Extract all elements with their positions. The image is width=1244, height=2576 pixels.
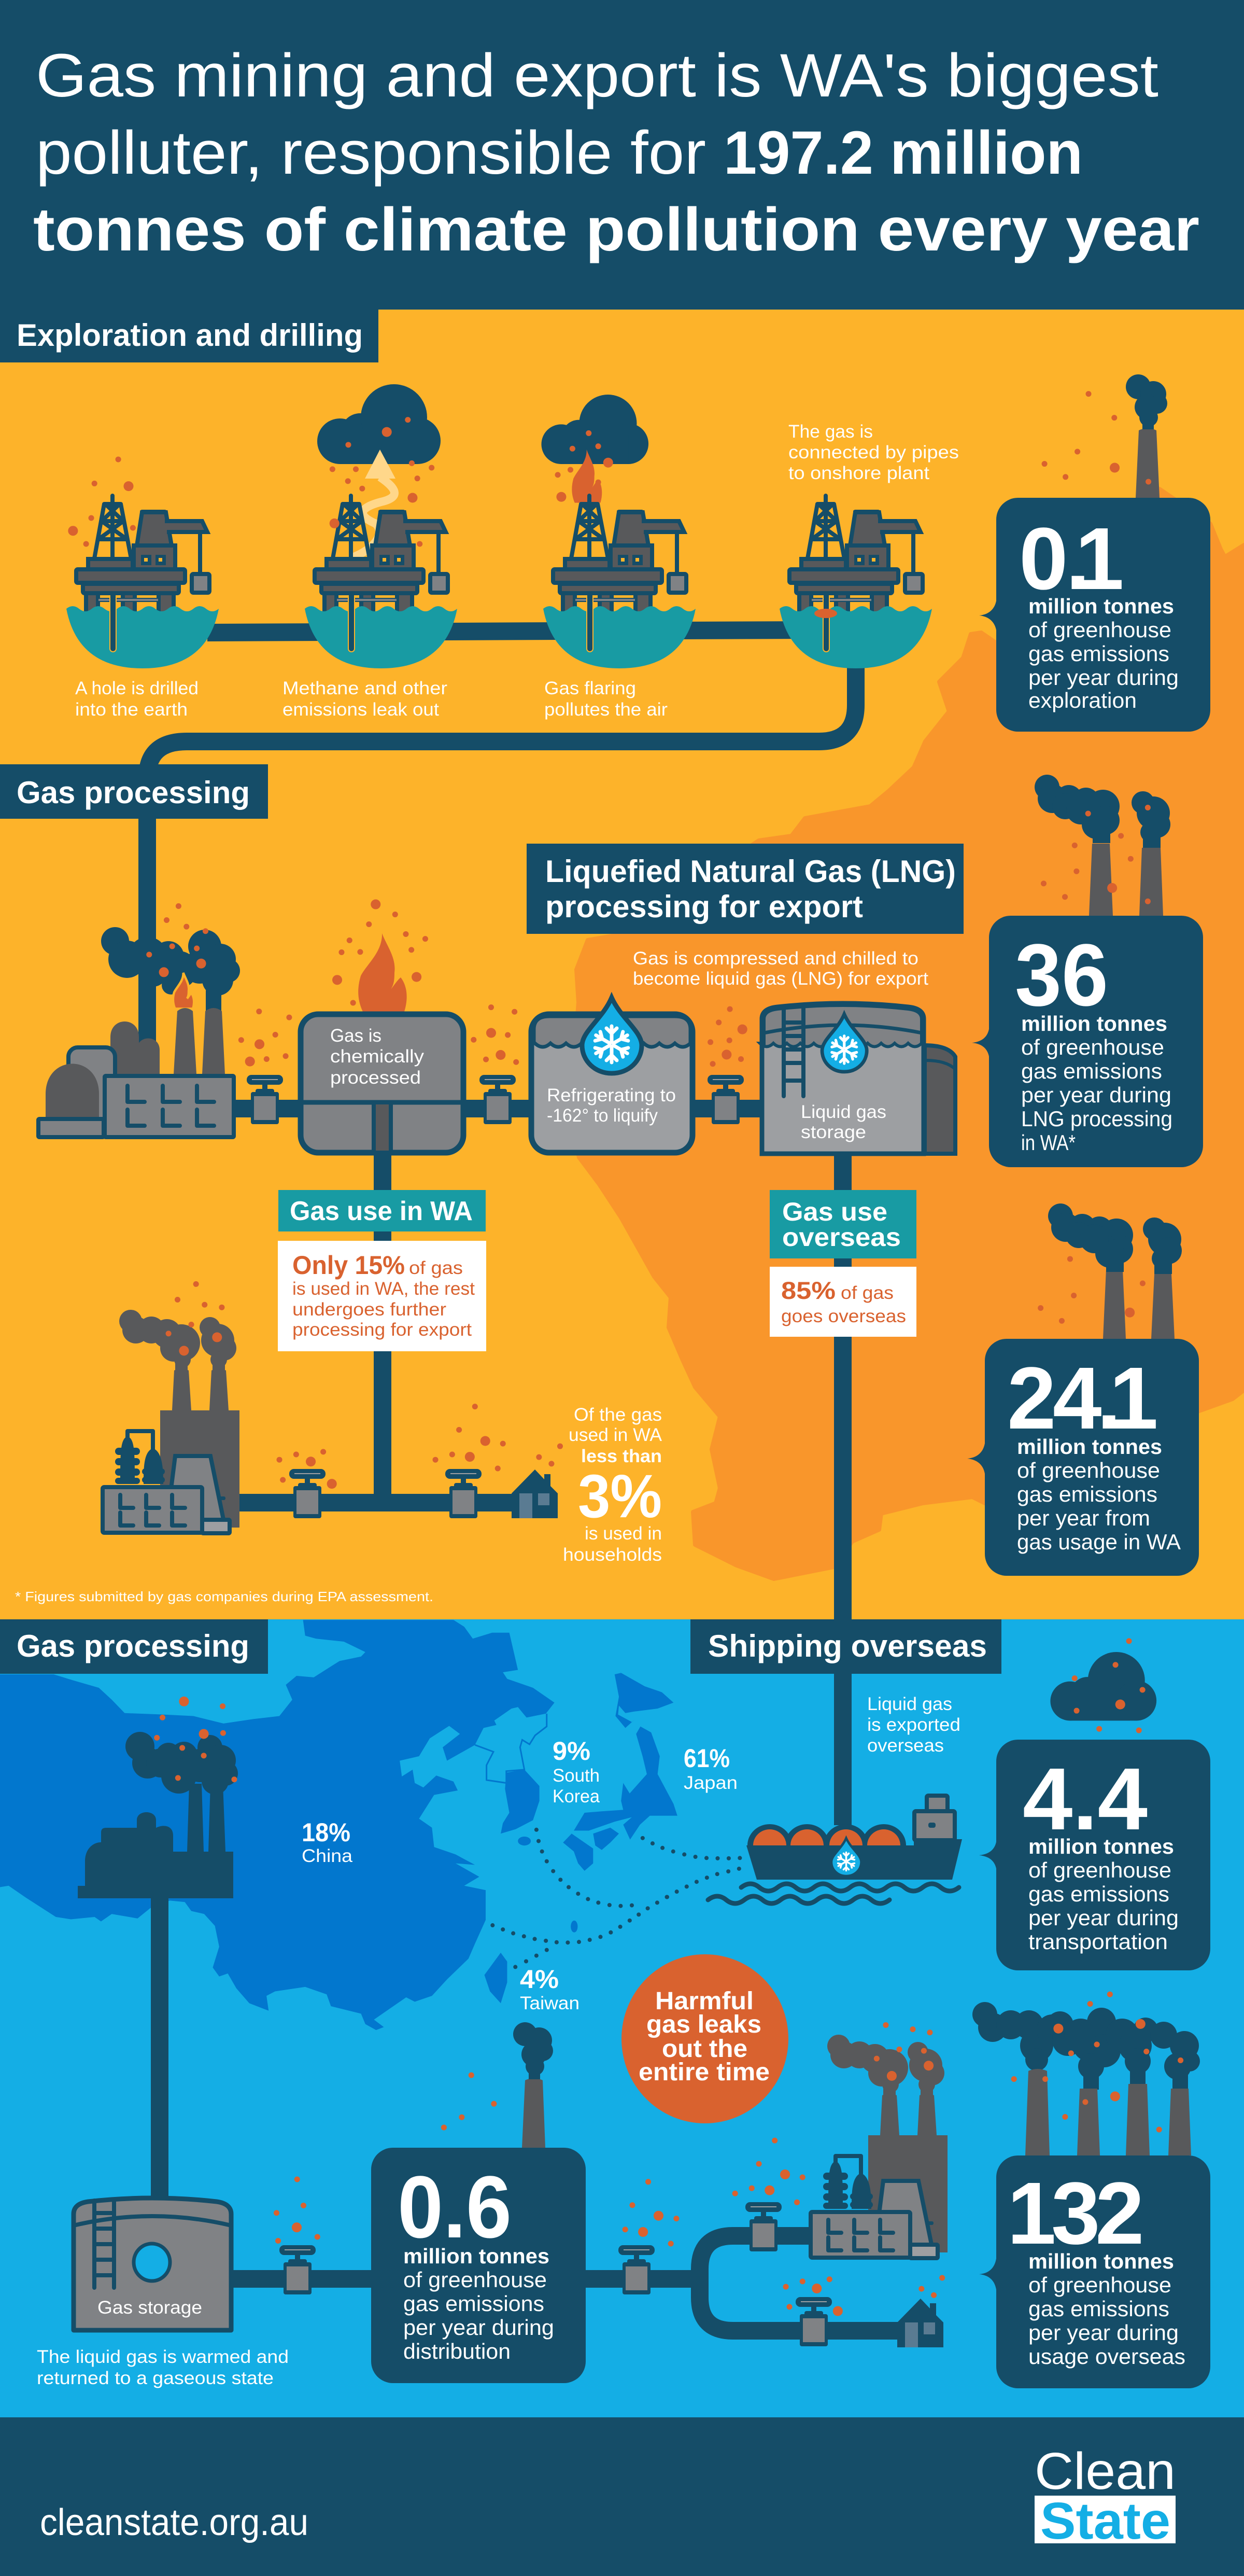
heading: gas processing overseas: Gas processing xyxy=(17,1629,249,1663)
stat: LNG 36: of greenhouse xyxy=(1021,1035,1164,1059)
methane arrow xyxy=(352,450,395,557)
callout: only 15%: Only 15% xyxy=(292,1251,405,1280)
refrigeration box: Refrigerating to xyxy=(547,1085,676,1105)
heading: LNG processing: processing for export xyxy=(545,889,863,924)
map: East Asia xyxy=(0,1620,677,2030)
chemical processing box: chemically xyxy=(330,1046,425,1067)
stat: usage overseas 132: of greenhouse xyxy=(1028,2273,1171,2297)
stat: usage overseas 132: million tonnes xyxy=(1028,2249,1174,2273)
stat: distribution 0.6: distribution xyxy=(403,2339,511,2363)
valve 1 xyxy=(241,1012,289,1124)
label: South Korea 9%: Korea xyxy=(553,1786,600,1807)
callout: only 15%: of gas xyxy=(409,1258,463,1278)
stat: LNG 36: gas emissions xyxy=(1021,1059,1162,1083)
rig 4: connection xyxy=(780,422,959,668)
stat: distribution 0.6: million tonnes xyxy=(403,2244,549,2268)
text: warmed and returned xyxy=(37,2347,289,2388)
heading: gas processing xyxy=(0,764,268,819)
rig 3: gas flaring xyxy=(541,395,696,720)
stat: exploration 0.1 xyxy=(979,374,1210,732)
stat: exploration 0.1: per year during xyxy=(1028,665,1179,690)
stat: exploration 0.1: gas emissions xyxy=(1028,641,1169,666)
title xyxy=(33,41,1199,264)
valve: before split xyxy=(618,2182,676,2294)
rig 2: methane leak xyxy=(282,384,457,720)
stat: WA usage 24.1: million tonnes xyxy=(1017,1435,1162,1459)
cloud xyxy=(541,395,648,464)
stat: LNG 36: LNG processing xyxy=(1021,1107,1172,1131)
distribution pipes xyxy=(233,2236,898,2331)
heading: gas use in WA xyxy=(278,1190,486,1231)
chimneys and smoke xyxy=(1041,1203,1182,1339)
logo: Clean State xyxy=(1035,2442,1176,2550)
label: China 18%: China xyxy=(302,1846,353,1866)
background: blue section xyxy=(0,1619,1244,2417)
logo: Clean State: State xyxy=(1040,2492,1170,2550)
stat: transportation 4.4: million tonnes xyxy=(1028,1835,1174,1858)
valve 3 xyxy=(708,1009,744,1124)
LNG ship xyxy=(708,1796,962,1903)
flame xyxy=(358,933,407,1012)
heading: shipping overseas: Shipping overseas xyxy=(708,1629,987,1663)
text: liquid gas exported xyxy=(867,1694,960,1756)
callout: 85% xyxy=(770,1267,916,1337)
text: warmed and returned: The liquid gas is warmed and xyxy=(37,2347,289,2367)
logo: Clean State: Clean xyxy=(1035,2442,1176,2500)
label: Japan 61%: 61% xyxy=(684,1744,730,1773)
text: warmed and returned: returned to a gaseous state xyxy=(37,2368,274,2388)
chimney and smoke xyxy=(444,2022,553,2148)
text: less than 3% in households: Of the gas xyxy=(574,1405,662,1425)
stat: WA usage 24.1: gas usage in WA xyxy=(1017,1530,1181,1554)
chimney and smoke xyxy=(1044,374,1167,498)
stat: LNG 36: million tonnes xyxy=(1021,1012,1167,1035)
map: Australia xyxy=(570,489,1244,1579)
text: less than 3% in households: is used in xyxy=(585,1523,662,1544)
stat: usage overseas 132 xyxy=(972,1994,1210,2388)
rig 4: connection: connected by pipes xyxy=(788,442,959,463)
label: Taiwan 4%: 4% xyxy=(520,1965,559,1994)
label: South Korea 9% xyxy=(553,1737,600,1807)
flare xyxy=(572,450,602,503)
callout: only 15%: undergoes further xyxy=(292,1299,446,1320)
valve 2 xyxy=(474,1007,516,1124)
footnote: * Figures submitted by gas companies during EPA assessment. xyxy=(15,1589,433,1604)
stat: WA usage 24.1: per year from xyxy=(1017,1506,1150,1530)
text: liquid gas exported: overseas xyxy=(867,1735,944,1756)
China plant silhouette and storage pipe xyxy=(78,1701,238,2199)
stat: distribution 0.6 xyxy=(371,2022,586,2383)
stat: exploration 0.1: million tonnes xyxy=(1028,594,1174,618)
heading: exploration and drilling xyxy=(0,310,378,362)
label: South Korea 9%: South xyxy=(553,1766,600,1786)
chemical processing box: Gas is xyxy=(330,1026,381,1046)
callout: only 15%: processing for export xyxy=(292,1320,472,1340)
label: South Korea 9%: 9% xyxy=(553,1737,590,1766)
text: less than 3% in households xyxy=(563,1405,662,1565)
text: LNG explanation xyxy=(633,948,928,989)
text: LNG explanation: Gas is compressed and chilled to xyxy=(633,948,918,969)
stat: WA usage 24.1: 24.1 xyxy=(1007,1349,1158,1448)
label: Taiwan 4% xyxy=(520,1965,579,2013)
text: liquid gas exported: Liquid gas xyxy=(867,1694,952,1714)
rig 1: hole drilled: into the earth xyxy=(75,699,188,720)
stat: distribution 0.6: of greenhouse xyxy=(403,2267,547,2292)
valve and dots: storage xyxy=(276,2179,317,2294)
LNG storage tanks xyxy=(760,1003,955,1154)
callout: only 15%: is used in WA, the rest xyxy=(292,1279,475,1299)
valve and house: households branch xyxy=(435,1407,560,1518)
chimneys and smoke xyxy=(1035,775,1170,916)
stat: distribution 0.6: 0.6 xyxy=(398,2158,512,2257)
stat: exploration 0.1: 0.1 xyxy=(1019,510,1124,608)
website: cleanstate.org.au xyxy=(40,2502,308,2543)
label: China 18%: 18% xyxy=(302,1818,350,1847)
callout: harmful gas leaks xyxy=(621,1954,788,2123)
chemical processing box: processed xyxy=(330,1068,421,1088)
stat: usage overseas 132: per year during xyxy=(1028,2320,1179,2345)
stat: transportation 4.4: of greenhouse xyxy=(1028,1858,1171,1882)
callout: 85%: 85% xyxy=(781,1277,836,1304)
rig 4: connection: to onshore plant xyxy=(788,463,929,483)
stat: usage overseas 132: 132 xyxy=(1007,2164,1144,2263)
smoke xyxy=(101,927,240,1011)
rig 3: gas flaring: pollutes the air xyxy=(544,699,668,720)
callout: only 15% xyxy=(278,1241,486,1351)
stat: exploration 0.1: exploration xyxy=(1028,688,1137,712)
gas processing plant xyxy=(38,906,240,1137)
callout: 85%: of gas xyxy=(841,1283,894,1303)
refrigeration box xyxy=(531,998,692,1153)
heading: LNG processing: Liquefied Natural Gas (LNG) xyxy=(545,854,956,889)
rig 1: hole drilled: A hole is drilled xyxy=(75,678,199,698)
stat: WA usage 24.1: of greenhouse xyxy=(1017,1458,1160,1482)
heading: exploration and drilling: Exploration and drilling xyxy=(17,318,363,353)
shipping routes xyxy=(492,1830,740,1967)
callout: harmful gas leaks: entire time xyxy=(639,2059,770,2086)
text: less than 3% in households: used in WA xyxy=(569,1425,662,1445)
title: 197.2 million xyxy=(724,119,1083,187)
rig 4: connection: The gas is xyxy=(788,422,873,442)
text: less than 3% in households: less than xyxy=(581,1446,662,1466)
text: less than 3% in households: households xyxy=(563,1545,662,1565)
callout: harmful gas leaks: gas leaks xyxy=(646,2011,761,2038)
stat: usage overseas 132: usage overseas xyxy=(1028,2344,1185,2369)
stat: LNG 36: per year during xyxy=(1021,1083,1171,1107)
stat: WA usage 24.1 xyxy=(967,1203,1199,1576)
stat: transportation 4.4: gas emissions xyxy=(1028,1882,1169,1906)
heading: shipping overseas xyxy=(690,1619,1001,1674)
stat: usage overseas 132: gas emissions xyxy=(1028,2297,1169,2321)
header band xyxy=(0,0,1244,310)
label: China 18% xyxy=(302,1818,353,1866)
title: Gas mining and export is WA's biggest xyxy=(36,41,1158,110)
heading: gas use overseas: overseas xyxy=(782,1223,901,1252)
text: LNG explanation: become liquid gas (LNG) for export xyxy=(633,969,928,989)
callout: 85%: goes overseas xyxy=(781,1306,906,1326)
stat: LNG 36: in WA* xyxy=(1021,1130,1076,1155)
stat: LNG 36: 36 xyxy=(1015,926,1108,1025)
heading: gas use in WA: Gas use in WA xyxy=(290,1196,473,1226)
stat: distribution 0.6: gas emissions xyxy=(403,2291,544,2316)
heading: gas use overseas: Gas use xyxy=(782,1197,887,1226)
callout: harmful gas leaks: out the xyxy=(662,2035,747,2063)
LNG storage tanks: Liquid gas xyxy=(801,1102,886,1122)
footer band xyxy=(0,2417,1244,2576)
text: less than 3% in households: 3% xyxy=(578,1462,662,1531)
text: liquid gas exported: is exported xyxy=(867,1715,960,1735)
rig 1: hole drilled xyxy=(66,459,219,720)
callout: harmful gas leaks: Harmful xyxy=(655,1987,754,2015)
stat: transportation 4.4: per year during xyxy=(1028,1906,1179,1930)
label: Taiwan 4%: Taiwan xyxy=(520,1993,579,2013)
rig 3: gas flaring: Gas flaring xyxy=(544,678,636,698)
heading: gas processing: Gas processing xyxy=(17,775,250,810)
cloud xyxy=(1050,1641,1156,1730)
title: tonnes of climate pollution every year xyxy=(33,195,1199,264)
stat: transportation 4.4: 4.4 xyxy=(1023,1750,1148,1849)
valve and house: overseas households xyxy=(786,2278,943,2347)
gas storage tank: Gas storage xyxy=(97,2298,202,2318)
heading: gas processing overseas xyxy=(0,1619,268,1674)
chimneys and smoke xyxy=(972,1994,1200,2155)
stat: WA usage 24.1: gas emissions xyxy=(1017,1482,1157,1506)
LNG storage tanks: storage xyxy=(801,1122,866,1142)
heading: LNG processing xyxy=(527,844,964,934)
WA power plant xyxy=(103,1284,239,1533)
gas storage tank xyxy=(74,2198,231,2330)
background: yellow section xyxy=(0,310,1244,1619)
stat: exploration 0.1: of greenhouse xyxy=(1028,618,1171,642)
valve and dots: WA plant branch xyxy=(279,1452,332,1518)
label: Japan 61% xyxy=(684,1744,738,1793)
heading: gas use overseas xyxy=(770,1190,916,1258)
chemical processing box xyxy=(301,904,463,1153)
cloud xyxy=(317,384,441,464)
refrigeration box: -162° to liquify xyxy=(547,1105,658,1126)
title: polluter, responsible for xyxy=(36,119,706,187)
rig 2: methane leak: emissions leak out xyxy=(282,699,439,720)
overseas power plant xyxy=(735,2025,948,2258)
label: Japan 61%: Japan xyxy=(684,1773,738,1793)
cold drop xyxy=(582,998,642,1073)
stat: LNG 36 xyxy=(972,775,1203,1167)
pipes: offshore to processing xyxy=(147,630,856,1825)
flare xyxy=(173,973,194,1009)
stat: transportation 4.4 xyxy=(979,1641,1210,1970)
stat: distribution 0.6: per year during xyxy=(403,2315,554,2340)
stat: transportation 4.4: transportation xyxy=(1028,1929,1168,1954)
rig 2: methane leak: Methane and other xyxy=(282,678,447,698)
